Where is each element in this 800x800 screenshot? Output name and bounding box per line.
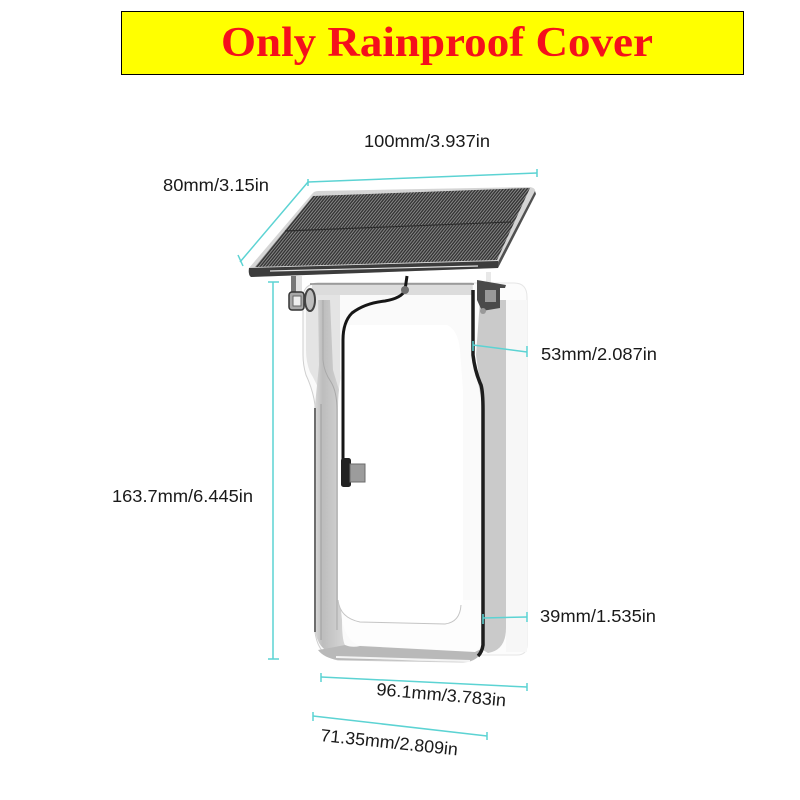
USB-C plug	[341, 458, 365, 487]
label: outer width: 96.1mm/3.783in	[376, 679, 507, 710]
right gray band	[476, 300, 506, 653]
right dark edge	[473, 290, 483, 656]
label: 39mm depth: 39mm/1.535in	[540, 606, 656, 626]
dimension: height	[268, 282, 279, 659]
cable	[343, 276, 407, 462]
label: panel depth: 80mm/3.15in	[163, 175, 269, 195]
dimension: panel width	[308, 169, 537, 186]
label: inner width: 71.35mm/2.809in	[320, 725, 459, 759]
cable clip	[401, 286, 409, 294]
dimension: 39mm depth	[483, 612, 527, 624]
right hinge	[477, 272, 506, 314]
label: panel width: 100mm/3.937in	[364, 131, 490, 151]
inner window	[338, 325, 463, 623]
left hinge	[289, 276, 315, 311]
rainproof cover illustration	[249, 187, 536, 662]
label: height: 163.7mm/6.445in	[112, 486, 253, 506]
top rail	[312, 285, 472, 295]
dimension: outer width	[321, 673, 527, 691]
lower inner clear panel	[340, 600, 483, 652]
label: 53mm depth: 53mm/2.087in	[541, 344, 657, 364]
title: Only Rainproof Cover	[221, 20, 653, 66]
bottom gray lip	[318, 645, 483, 661]
far right light band	[506, 300, 527, 652]
dimension: panel depth	[238, 182, 308, 266]
upper left panel shade	[306, 292, 342, 400]
back plate	[470, 283, 527, 655]
title banner	[122, 12, 744, 74]
dimension: inner width	[313, 712, 487, 740]
solar panel	[249, 187, 536, 277]
front cover frame	[303, 283, 483, 662]
dimension: 53mm depth	[473, 341, 527, 357]
left gray band	[315, 300, 345, 655]
